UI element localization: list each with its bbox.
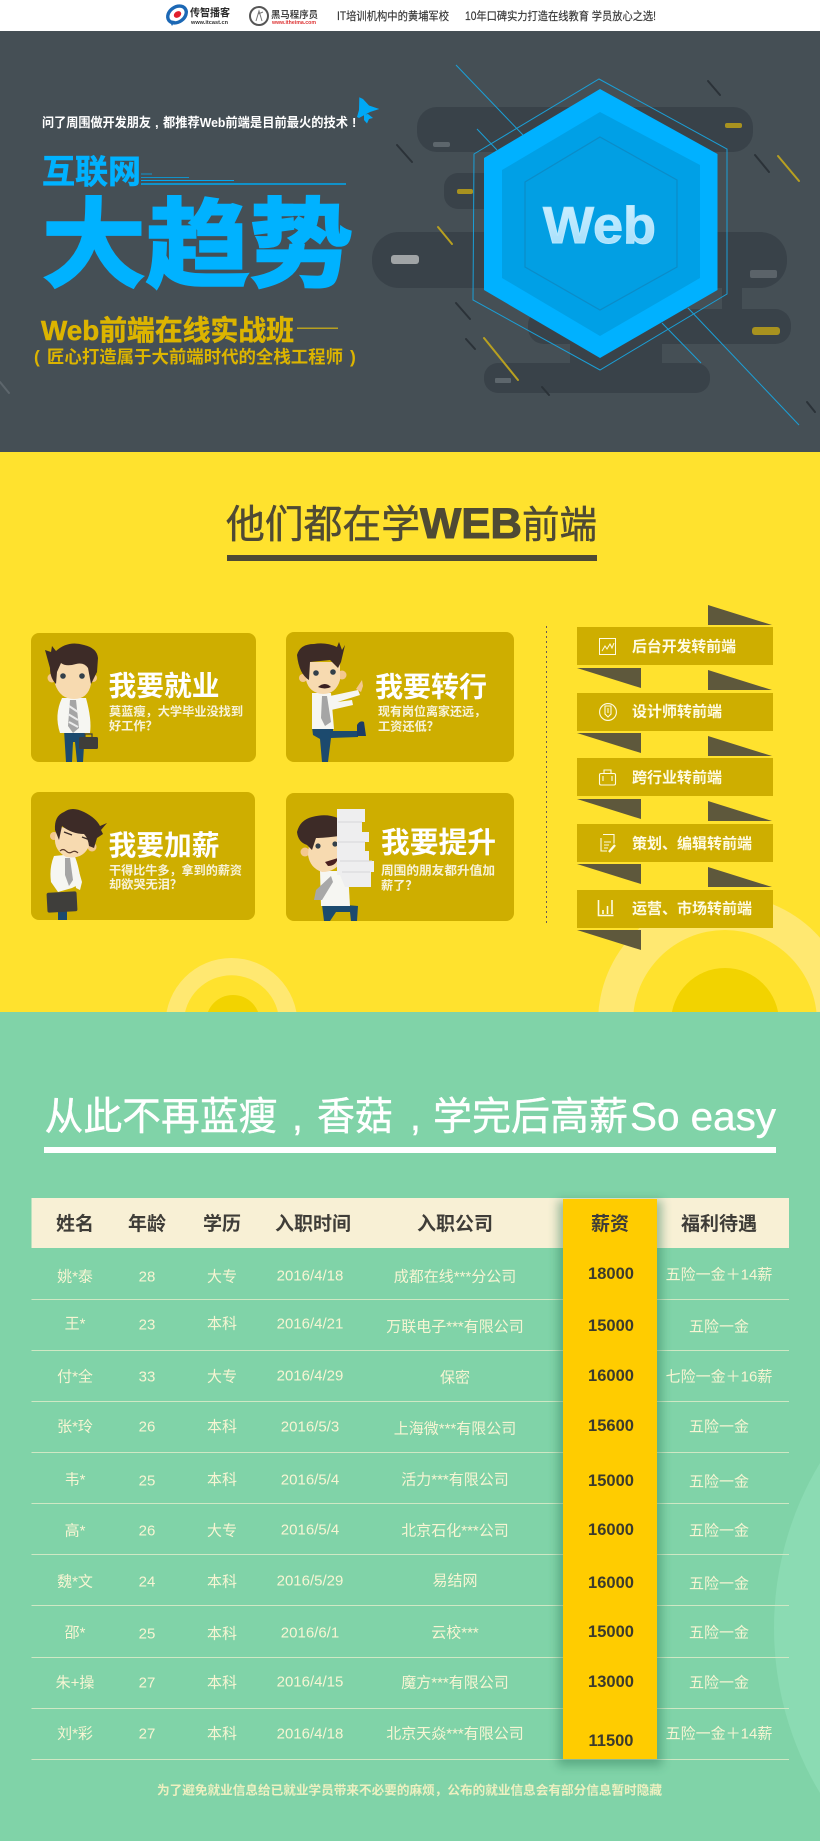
hero small dashes	[391, 123, 780, 383]
hero intro sentence: ,	[155, 115, 159, 130]
dotted divider	[546, 626, 548, 925]
row 1: 18000	[588, 1265, 634, 1283]
course name rule	[297, 328, 338, 329]
row 10: 刘*彩	[57, 1726, 93, 1742]
logo: itcast: www.itcast.cn	[190, 20, 229, 26]
row 10: 五险一金＋14薪	[666, 1726, 772, 1742]
row 8: 邵*	[65, 1624, 86, 1642]
row 10: 北京天焱***有限公司	[386, 1726, 524, 1742]
ribbon: marketing to frontend	[577, 867, 773, 950]
ribbon: designer to frontend	[577, 670, 773, 753]
green section background	[0, 1012, 820, 1841]
ribbon: backend to frontend	[577, 605, 773, 688]
row 3: 大专	[207, 1368, 237, 1386]
section heading: salary claim: 学完后高薪	[433, 1096, 628, 1139]
hero main title: 大趋势	[42, 191, 353, 300]
table header labels: 薪资	[591, 1213, 629, 1235]
web hexagon badge	[473, 79, 727, 370]
row 9: 13000	[588, 1673, 634, 1691]
table header labels: 入职时间	[275, 1213, 351, 1235]
icon: briefcase	[600, 770, 616, 785]
row 5	[65, 1472, 749, 1490]
row 8: 云校***	[431, 1624, 479, 1642]
card title: 我要就业	[108, 670, 220, 702]
hero course tagline: 匠心打造属于大前端时代的全栈工程师	[47, 347, 343, 367]
heading underline	[227, 555, 597, 561]
character: man carrying paper stack	[297, 809, 374, 921]
ribbon label: 运营、市场转前端	[632, 900, 752, 918]
ribbon label: 后台开发转前端	[632, 638, 736, 656]
row 5: 25	[139, 1472, 155, 1490]
row 2: 2016/4/21	[277, 1316, 343, 1332]
row 6: 五险一金	[689, 1522, 749, 1540]
character: calm man with briefcase	[45, 643, 98, 762]
card description: 工资还低？	[378, 718, 439, 734]
row 9: 朱+操	[56, 1674, 94, 1692]
table: employment records	[32, 1198, 789, 1766]
row 2	[65, 1316, 749, 1336]
row 3: 保密	[440, 1370, 470, 1386]
salary column shadow	[558, 1200, 662, 1766]
row 5: 韦*	[65, 1472, 86, 1488]
character: man stepping forward	[297, 642, 366, 762]
top header bar	[0, 0, 820, 31]
table header labels: 学历	[203, 1212, 241, 1235]
row 6: 26	[139, 1522, 155, 1540]
hero speed lines	[141, 174, 346, 184]
icon: line chart	[600, 638, 616, 654]
row 7	[57, 1572, 749, 1592]
row 4: 上海微***有限公司	[394, 1420, 516, 1438]
section heading: salary claim: ,	[410, 1096, 421, 1139]
card description: 薪了？	[381, 878, 418, 892]
row 7: 2016/5/29	[277, 1572, 343, 1590]
ribbon: editor to frontend	[577, 801, 773, 884]
row 7: 魏*文	[57, 1574, 93, 1590]
row 9: 2016/4/15	[277, 1674, 343, 1690]
row 9: 27	[139, 1674, 155, 1692]
row 10: 本科	[207, 1726, 237, 1742]
row 1: 28	[139, 1268, 155, 1286]
character: crying man with briefcase	[46, 809, 107, 920]
row 4	[57, 1417, 749, 1438]
row 6: 高*	[65, 1522, 86, 1540]
table header labels: 姓名	[56, 1213, 94, 1235]
card description: 周围的朋友都升值加	[381, 862, 495, 878]
row 3: 付*全	[57, 1368, 93, 1386]
icon: bar chart	[598, 900, 614, 916]
hero intro sentence: !	[352, 115, 356, 130]
section heading: salary claim: 香菇	[317, 1096, 393, 1139]
card: want to advance	[286, 793, 514, 921]
ribbon label: 跨行业转前端	[632, 768, 722, 786]
card: want a raise	[31, 792, 255, 920]
table header labels: 年龄	[128, 1212, 166, 1235]
hero diagonal strokes	[0, 81, 815, 412]
icon: plane	[357, 97, 379, 124]
hero course name: Web前端在线实战班	[41, 315, 294, 346]
card title: 我要加薪	[108, 830, 220, 861]
section heading: everyone learns web frontend: 前端	[522, 505, 597, 547]
row 6: 2016/5/4	[281, 1522, 339, 1538]
section heading: salary claim	[44, 1096, 777, 1153]
logo: itcast: 传智播客	[190, 6, 230, 19]
icon: coin badge	[600, 704, 616, 720]
row 10	[57, 1726, 772, 1750]
logo: itheima: www.itheima.com	[271, 20, 317, 26]
heading underline	[44, 1147, 776, 1153]
hero course tagline: (	[34, 347, 40, 367]
row 10: 27	[139, 1726, 155, 1742]
row 8: 15000	[588, 1623, 634, 1641]
ribbon label: 设计师转前端	[632, 702, 722, 720]
row 1: 成都在线***分公司	[394, 1268, 516, 1286]
card title: 我要提升	[381, 826, 496, 860]
row 4: 五险一金	[689, 1418, 749, 1436]
logo: itheima: 黑马程序员	[271, 9, 318, 21]
ribbon label: 策划、编辑转前端	[632, 834, 752, 852]
row 3	[57, 1367, 772, 1386]
row 2: 15000	[588, 1317, 634, 1335]
logo: itheima	[250, 7, 318, 26]
card description: 莫蓝瘦，大学毕业没找到	[109, 704, 243, 718]
card description: 现有岗位离家还远，	[378, 704, 486, 718]
row 6: 北京石化***公司	[401, 1522, 509, 1540]
row 6: 16000	[588, 1521, 634, 1539]
row 10: 11500	[589, 1732, 633, 1750]
card: want a job	[31, 633, 256, 762]
hero subtitle: internet: 互联网	[42, 153, 141, 190]
hero course tagline: )	[350, 347, 356, 367]
row 2: 王*	[65, 1316, 86, 1332]
decorative circles right	[598, 895, 820, 1149]
row 8: 五险一金	[689, 1624, 749, 1642]
footnote: 为了避免就业信息给已就业学员带来不必要的麻烦，公布的就业信息会有部分信息暂时隐藏	[157, 1782, 663, 1798]
row 8: 25	[139, 1626, 155, 1642]
row 1: 五险一金＋14薪	[666, 1266, 772, 1284]
row 7: 易结网	[432, 1572, 478, 1590]
row 7: 五险一金	[689, 1576, 749, 1592]
row 7: 本科	[207, 1574, 237, 1590]
row 2: 本科	[207, 1316, 237, 1332]
card description: 干得比牛多，拿到的薪资	[109, 862, 242, 878]
web label: Web	[543, 197, 656, 255]
row 8: 2016/6/1	[281, 1624, 339, 1642]
hero thin blue lines	[456, 65, 799, 425]
row 5: 2016/5/4	[281, 1472, 339, 1488]
section heading: everyone learns web frontend	[226, 500, 597, 561]
card description: 好工作？	[109, 718, 158, 733]
row 4: 2016/5/3	[281, 1418, 339, 1436]
row 1: 姚*泰	[57, 1268, 93, 1286]
row 2: 万联电子***有限公司	[386, 1318, 524, 1336]
section heading: salary claim: So easy	[630, 1096, 777, 1139]
row 3: 16000	[588, 1367, 634, 1385]
row 7: 24	[139, 1574, 155, 1590]
row 9	[56, 1673, 749, 1692]
table header band	[32, 1198, 789, 1248]
hero intro sentence: 问了周围做开发朋友	[42, 115, 151, 130]
row 2: 23	[139, 1316, 155, 1334]
decorative green circle	[774, 1463, 820, 1793]
table header labels: 福利待遇	[681, 1213, 757, 1235]
decorative circles left	[166, 958, 298, 1090]
row 5: 五险一金	[689, 1474, 749, 1490]
row 3: 七险一金＋16薪	[666, 1368, 772, 1386]
header slogan 2: 10年口碑实力打造在线教育 学员放心之选!	[465, 9, 656, 23]
section heading: everyone learns web frontend: 他们都在学	[226, 504, 420, 547]
row 8	[65, 1623, 749, 1642]
row 10: 2016/4/18	[277, 1726, 343, 1742]
row 4: 26	[139, 1418, 155, 1436]
hero dark pill backdrop	[372, 107, 791, 393]
hero panel background	[0, 31, 820, 452]
row 9: 五险一金	[689, 1674, 749, 1692]
section heading: salary claim: ,	[292, 1096, 303, 1139]
header slogan 1: IT培训机构中的黄埔军校	[337, 9, 449, 23]
row 3: 2016/4/29	[277, 1368, 343, 1384]
table header labels	[56, 1212, 757, 1235]
row 6: 大专	[207, 1522, 237, 1540]
row 3: 33	[139, 1368, 155, 1386]
row 4: 15600	[588, 1417, 634, 1435]
row 4: 本科	[207, 1418, 237, 1436]
row 7: 16000	[588, 1574, 634, 1592]
hero intro sentence: 都推荐Web前端是目前最火的技术	[163, 115, 348, 130]
row 5: 本科	[207, 1472, 237, 1488]
row 9: 魔方***有限公司	[401, 1674, 509, 1692]
row 1: 2016/4/18	[277, 1268, 343, 1284]
logo: itcast	[165, 3, 230, 26]
section heading: everyone learns web frontend: WEB	[420, 500, 522, 548]
row 2: 五险一金	[689, 1318, 749, 1336]
section heading: salary claim: 从此不再蓝瘦	[44, 1096, 278, 1139]
row 6	[65, 1521, 749, 1540]
row 9: 本科	[207, 1674, 237, 1692]
row 5: 15000	[588, 1472, 634, 1490]
row 8: 本科	[207, 1626, 237, 1642]
row 1: 大专	[207, 1268, 237, 1286]
salary column highlight	[563, 1199, 657, 1759]
ribbon: cross industry to frontend	[577, 736, 773, 819]
yellow section background	[0, 452, 820, 1012]
card: change career	[286, 632, 514, 762]
row 1	[57, 1265, 772, 1286]
icon: document and pen	[601, 834, 615, 852]
row 4: 张*玲	[57, 1418, 93, 1436]
table header labels: 入职公司	[417, 1213, 493, 1235]
card description: 却欲哭无泪？	[109, 876, 182, 892]
card title: 我要转行	[375, 672, 487, 702]
row 5: 活力***有限公司	[401, 1472, 509, 1488]
